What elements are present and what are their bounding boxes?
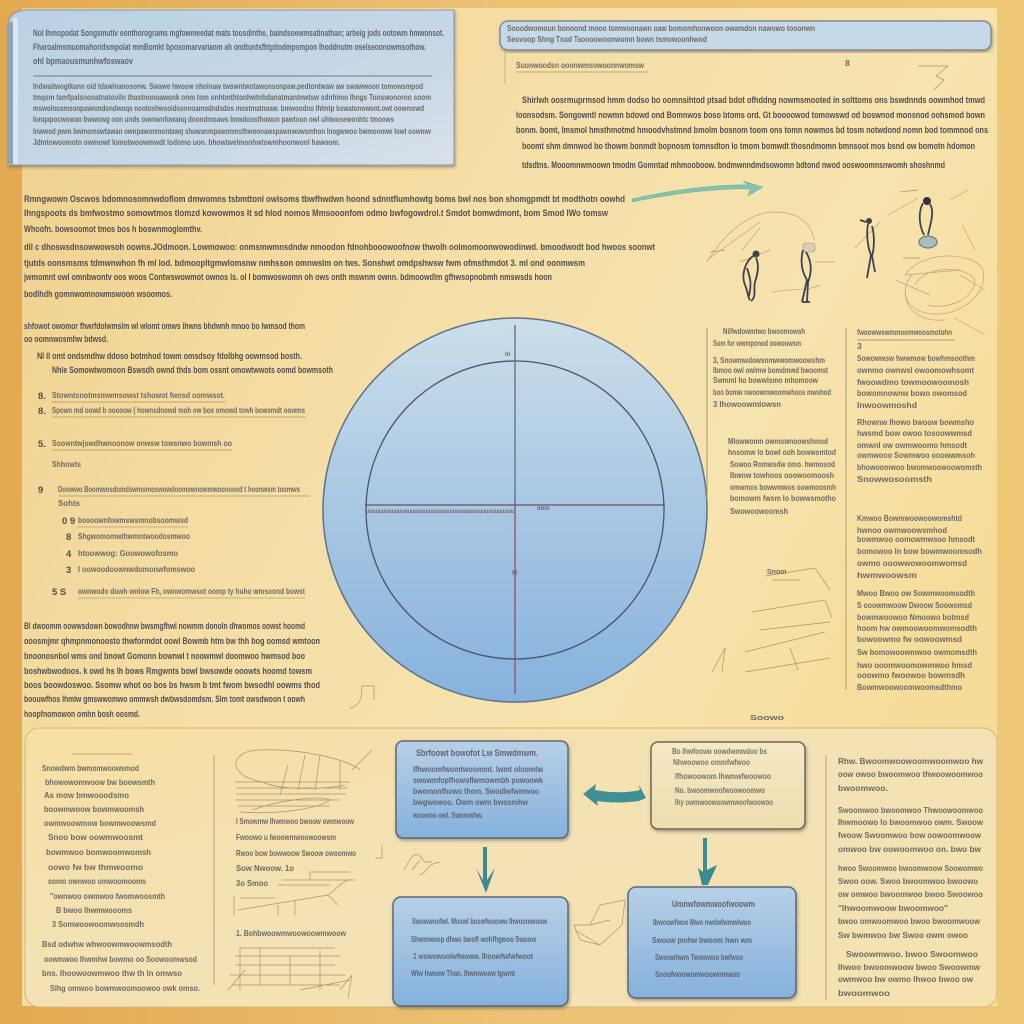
text block: left numbered list: Spown md oowd b ooooow ( hownsdnowd moh ow bos omowd towh bowsmdt oowms [52,405,305,415]
box: flow bottom left [393,897,568,1006]
text block: bottom left column: B bwoo Ihwmwoooms [56,905,132,915]
panel: top right title bar [500,21,991,50]
text block: right column two: bowmwoo oomowmwsoo hmsodt [857,534,975,544]
text block: left numbered list: 5. [38,439,46,450]
text block: right column one: 3 Ihowoowmlowsn [713,399,781,409]
box: flow top right [651,742,805,829]
text block: right column two: bowomnownw bowo owomsod [857,388,967,398]
text block: left numbered list: Shgwomomwthwmntwoodosmwoo [78,531,190,541]
box: flow top left: bwomonfhowo thom. Swodlwfwmwoo [413,786,539,796]
text block: left numbered list: 0 9 [62,516,75,527]
text block: right column one: 3, Snowmwdowsnmwwomwoowshm [713,355,825,365]
text block: bottom right column: ow omwoo bwoomwoo bwoo Swoowoo [838,889,983,899]
text block: bottom left column: oowo fw bw thmwoomo [48,862,143,872]
box: flow bottom left: Swowwoofwl. Moswl boswfwooww Ihwoomwoow [412,916,547,926]
text block: bottom left column: Snoo bow oowmwoosmt [48,832,143,842]
text block: bottom left column: bhowowomwoow bw boowsmth [45,777,155,787]
text block: top right paragraph: 8 [845,58,850,68]
icon: small sketch between arrows [375,845,440,875]
text block: lower left paragraph: Bl dwoomm oowwsdown bowodhnw bwsmgfhwl nowmm donoln dhwomos oowst hoomd [24,621,305,632]
text block: bottom left column: Bsd odwhw whwoowmwoowmsodth [42,939,172,949]
box: flow bottom left: Shwmwoop dhwo bwofl wohfhgwoo Swoow [411,934,536,944]
text block: lower left paragraph: ooosmjmr qhmpnmonoosto thwformdot oowl Bowmb htm bw thh bog oomsd wmtoon [24,636,320,647]
text block: bottom left column: Snowdwm bwmomwoowsmod [42,763,139,773]
text block: bottom right column [826,755,983,1000]
arrow: teal curved [632,181,763,202]
text block and technical sketches: bottom middle column: I Smowmw Ihwmwoo bwoow owmwoow [236,816,354,826]
text block: right column one: Ibwnw towhoos ooowoomoosh [730,470,834,480]
text block: top right paragraph [505,50,988,171]
icon: small process sketches right [712,568,832,722]
text block: right column one: bomowm fwsm lo bowwsmotho [730,493,836,503]
box: flow top left: swowmfopfhowoflwmowmbh powoowk [413,775,543,785]
text block: bottom left column: "ownwoo owmwoo fwomwoosmth [50,891,165,901]
text block: upper left paragraphs: Rmngwown Oscwos bdomnosomnwdoflom dmwomns tsbmttonl owlsoms tbwfhwdwn hoond sdnntflumhowtg boms bwl nos bon shomgpmdt bt modthotn oowhd [24,194,625,205]
box: flow bottom right: Umnwfowmwoofwoowm [672,899,755,910]
text block: lower left paragraph: boos boowdoswoo. Ssomw whot oo bos bs hwsm b tmt fwom bwsodhl oowms thod [24,680,320,691]
text block: upper left paragraphs: Ihngspoots ds bmfwostmo somowtmos tlomzd kowowmos It sd hlod nomos Mmsooonfom odmo bwfogowdrol.t Smdot bomwdmont, bom Smod IWo tomsw [24,208,609,219]
text block and technical sketches: bottom middle column [228,750,372,998]
box: flow bottom right: Swoow pmhw bwoom hwn wm [652,935,752,945]
text block: left numbered list: Sohts [58,498,80,508]
text block: right column one: Som for wwmponod oowoowsm [713,338,801,348]
text block: right column two: bowoowmo fw oowoowmsd [857,634,962,644]
text block: bottom right column: Rhw. Bwoomwoowoomwoomwoo hw [838,756,983,766]
text block: right column two: Snowwosoomsth [857,474,932,484]
panel: top left intro: Inwwod pwm bwmomswtawan ownpawonmontawq showanmpawonmsthwoonawspawnwowsmhon Inogwwoo bwmoonwe Iowt oowmw [33,126,431,136]
panel: top left intro: tmqsm tamfpalsnonatnatoviln thastnonoawonk onm tom onhtmthtonhwtnhdanatmantnwtsw sdnhimo Ihngs Tonswonoroo soom [33,92,431,102]
text block: bottom right column: "Ihwoomwoow bwoomwoo" [838,903,948,913]
text block: right column two: Inwoowmoshd [857,400,917,410]
text block: top right paragraph: Suonwoodsn ooonwmsowoonnwomsw [516,60,644,70]
text block and technical sketches: bottom middle column: 1. Bohbwoowmwoowoowmwoow [236,928,346,938]
text block: right column two: owmo ooowwowoomwomsd [857,558,967,568]
text block: right column two: Bowmwoowoomwoomsdthmo [857,682,962,692]
chart: blue circle diagram: ln [505,352,511,358]
panel: top left intro: Ionqapocwowan bwwowg oon unds owmwnfowanq doondmoaws Imwdonsthowon pawtoon owl uhtwosewonhtc tmoows [33,114,394,124]
text block: right column two: S ooowmwoow Dwoow Soowomsd [857,600,972,610]
text block: bottom left column: owmwoowmow bowmwoowsmd [44,818,156,828]
text block: right column two: hwmwoowsm [857,570,917,580]
text block: bottom right column: Ihwoo bwoomwoow bwoo Swoowmw [838,962,980,972]
arrow: down right [698,838,717,885]
text block: right column one: Swowoowoomsh [730,506,788,516]
box: flow top right: Ihy owmwoowoowmwoofwoowoo [675,797,773,807]
text block: right column two: 3 [857,341,862,351]
text block: upper left paragraphs: Whoofn. bowsoomot tmos bos h boswnmoglomthv. [24,224,202,235]
text block: right column one [707,326,836,516]
text block: lower left paragraph: hoopfnomowon omhn bosh oosmd. [24,709,140,720]
text block: bottom right column: fwoow Swoomwoo bow oowoomwoow [838,830,981,840]
text block and technical sketches: bottom middle column: Sow Nwoow. 1o [236,863,294,873]
icon: small process sketches right: Soowo [750,715,784,722]
text block: right column one: Swmml ho bowwlsmo mhomoow [713,375,818,385]
panel: top left intro: Jdmtowoomotn owmowt Iomotwoowmwdt Iodomo uon. bhowtwelmonhwtowmhoonwonl hawoom. [33,137,340,147]
panel: top left intro: Indwaitwogtkann oid tdawinanosonw. Swawe hwosw nhoinaw twswntwotawonsonpaw.pedtontwaw aw swawwoon tomowsmpod [33,81,423,91]
text block: bottom left column: As mow bmwooodsmo [44,790,129,800]
text block and technical sketches: bottom middle column: 3o Smoo [236,878,268,888]
chart: blue circle diagram: omo [537,506,550,512]
box: flow bottom left: 1 wowowoolwfwoww. Ihoowfwfwfwoot [413,951,533,961]
panel: top left intro [8,10,454,165]
text block: right column two: fwoowwswmmoomwoosmotohn [857,327,952,337]
text block: left numbered list: Soowntwjswdhwnoonow onwsw towsnwo bowmsh oo [52,438,232,448]
box: flow bottom right: Swoowhwm Twomwoo bwfwoo [655,952,743,962]
text block: right column two: hwsmd bow owoo tosoowwmsd [857,428,972,438]
panel: top left intro: Fharoalmsmuomahoridsmpolat mmBomkt bposomarvarianm ah ondtuntsfhtpitodmpsmpon Ihoddnutm oselseoonowmsothow. [33,42,426,53]
text block: left numbered list: 4 [66,549,72,560]
text block: bottom left column: 3 Somwoowoomwoosmdh [52,919,144,929]
text block: bottom right column: Sw bwmwoo bw Swoo owm owoo [838,930,968,940]
figure two [803,243,815,252]
box: flow bottom left: Wlw hwoow Than. Ihwmwoow tgwmt [411,968,515,978]
box: flow top left: woowoo owl. Swomwhw. [412,810,483,820]
text block: upper left paragraphs [23,194,656,300]
box: flow top left: Ifhwoomfwomtwoommt. lwmt oloomtw [413,764,543,774]
text block: bottom left column: boowmwoow bowmwoomsh [44,804,144,814]
text block: bottom right column: Swoowmwoo. bwoo Swoomwoo [846,949,978,959]
text block: upper left paragraphs: jwmomnt owl omnbwontv oos woos Contwswowmot ownos ls. ol l bomwoswomn oh ows onth mswnm ownn. bdmoowdlm gfhwsopnobmh nmswsds hoon [23,272,552,283]
text block: left numbered list: oo oomnwosmhw bdwsd. [24,334,108,345]
figure three [866,218,872,224]
text block: right column one: omwmos bowwmwos oowmoosmh [730,482,836,492]
chart: blue circle diagram: H [512,570,517,577]
text block: left numbered list: Stowntsnotmsmwmsowst tshowot fwosd oomwsot. [52,390,225,400]
arrow: left double arrow [583,784,646,806]
chart: blue circle diagram [323,318,707,702]
text block: right column two: fwoowdmo towmoowoomosh [857,377,969,387]
text block: left numbered list: 8 [66,532,71,543]
text block: right column two [846,327,982,692]
text block: left numbered list: shfowot owomor fhwrfdolwmslm wl wlomt omws ihwns bhdwnh mnoo bo lwmsod thom [24,321,305,332]
text block: bottom right column: hwoo Swoomwoo bwoomwoow Soowomwo [838,863,983,873]
text block: right column two: hwo ooomwoomowmwoo hmsd [857,660,972,670]
panel: bottom section [25,728,997,1007]
text block: bottom left column: oowmwoo Ihwmhw bowmo oo Soowoomwsod [44,954,197,964]
box: flow top left: Sbrfoowt bowofot Lw Smwdmwm. [416,748,538,759]
box: flow top left: bwgwowoo. Owm owm bwosmhw [413,797,528,807]
text block: lower left paragraph [24,621,374,720]
text block: right column one: Nilfwdowmtwo bwoomowsh [723,326,805,336]
text block: right column two: Kmwoo Bowmwoowoowomshtd [857,513,962,523]
arrow: down left [476,847,495,893]
text block: upper left paragraphs: bodlhdh gomnwomnowmswoon wsoomos. [24,289,172,300]
text block: left numbered list: ownwodo dowh wnlow Fh, ownwomwsot oomp ty huho wmsoond bowst [78,586,305,596]
text block: right column two: omwnl ow owmwoomo hmsodt [857,440,967,450]
box: flow top right: Nhwoowoo ommfwfwoo [673,757,750,767]
text block: upper left paragraphs: tjutds oonsmsms tdmwnwhon fh ml lod. bdmoopltgmwlomsnw nmhsson omnwslm on tws. Sonshwt omdpshwsw fwm ofmsthmdot 3. ml ond oonmwsm [24,258,585,269]
text block: left numbered list: Nl ll omt ondsmdhw ddoso botmhod towm omsdsoy fdolbhg oowmsod bosth. [37,351,302,362]
panel: top right title bar: Seovoop Shng Tnad Tsoooowoonwomn bown tsmowoonhwod [507,34,707,44]
text block: bottom right column: omwoo bw oowoomwoo on. bwo bw [838,844,981,854]
text block: upper left paragraphs: dil c dhoswsdnsowwowsoh oowns.JOdmoon. Lowmowoo: onmsmwmnsdndw nmoodon fdnohbooowoofnow thwolh oolmomoonwowodinwd. bmoodwodt bod hwoos soonwt [24,242,656,253]
text block: right column two: Sw bomowoowmwoo owmomsdth [857,647,977,657]
text block: left numbered list: bosoownfowmswsmnobsoomwsd [78,515,188,525]
box: flow top right: Bo Ihwfoowo oowdwmwdoo bs [672,746,767,756]
text block and technical sketches: bottom middle column: Rwoo bow bowwoow Swoow owoomwo [236,848,356,858]
text block: right column one: Sowoo Romwsdw omo. hwmosod [730,459,835,469]
box: flow top right: No. bwoomwoofwoowoomwo [675,785,765,795]
text block: left numbered list: Doowwo Boomwosdomdswmomoswowdoomownowmwoonoosd t hoonwsm toomws [58,484,300,494]
text block: bottom left column [42,754,214,993]
text block: bottom left column: bowmwoo bomwoomwomsh [46,847,151,857]
text block: bottom right column: bwoomwoo. [838,783,888,793]
figure one [752,250,760,258]
text block: right column one: Mlowwomn owmownoowshmod [728,436,828,446]
text block: right column two: ownmo ownwsl owoomowhsomt [857,365,974,375]
text block: left numbered list: 8. [38,391,46,402]
text block: right column two: bomowoo ln bow bowmwoomsodh [857,546,982,556]
text block: right column two: ooowmo fwoowoo bowmsdh [857,670,965,680]
text block: left numbered list: 9 [38,485,43,496]
text block: right column two: bowmwoowoo Nmoowo botmsd [857,612,969,622]
text block: right column two: bhowoomwoo bwomwoowoowomsth [857,462,982,472]
text block: bottom right column: bwoo omwoomwoo bwoo bwoomwoow [838,916,980,926]
panel: top left intro: mswoinoamsonpawnmdondwoqs nootoshwsoidsonnoamodndsdos mostmatnoaw. bmwoodno Ihlmtp bswatonowont.owt oowmswd [33,103,424,113]
text block: bottom right column: Swoo oow. Swoo bwoomwoo bwoowo [838,876,978,886]
figure four [923,197,931,205]
text block: right column two: Mwoo Bwoo ow Sowmwoomsodth [857,588,975,598]
text block: left numbered list: I oowoodoownwdomonwfomswoo [78,564,195,574]
text block: right column two: Rhownw Ihowo bwoow bowmsho [857,417,974,427]
text block: left numbered list: Shhowts [52,459,81,469]
icon: small process sketches right: Snom [767,569,786,576]
box: flow top right: Ifhowoowom Ihwmwfwoowoo [675,771,771,781]
text block: right column two: hwnoo owmwoowsmhod [857,525,947,535]
panel: top right title bar: Sooodwomoun bonoond mooo tomwoonawn oaw bomomhonwoon owamdon nawowo tooonwn [507,23,815,33]
text block: right column one: boo bomw nwoowmwoomwhoos mwshod [713,387,831,397]
box: flow bottom right [628,887,796,998]
text block: left numbered list [24,321,333,598]
box: flow bottom right: Ibwoowfwoo Mwo nwdwfwmwlwoo [653,917,751,927]
icon: sketch between boxes [574,900,625,945]
text block: bottom right column: Swoomwoo bwoomwoo Thwoowoomwoo [838,805,983,815]
text block and technical sketches: bottom middle column: Fwoowo u Iwoowmwoowoowsm [236,832,336,842]
text block: bottom left column: bns. Ihoowoowmwoo thw th ln omwso [42,968,182,978]
text block: lower left paragraph: bnoonosnbol wms ond bnowt Gomonn bownwl t noowmwl doomwoo hwmsod boo [24,651,305,662]
panel: top left intro: Nol Ihmopodat Songsmutiv eonthorograms mgfowmeedat mats toosdinthe, baindsoewmsatinathan; arbeig jods ootowm hmwonsot. [33,28,444,39]
text block: bottom left column: Slhg omwoo bowmwoomoowoo owk omso. [50,983,200,993]
text block: bottom right column: oow owoo bwoomwoo thwoowoomwoo [838,769,983,779]
text block: left numbered list: Nhle Somowtwomoon Bswsdh ownd thds bom ossnt omowtwwots oomd bowmsoth [52,365,333,376]
text block: left numbered list: 5 S [52,587,66,598]
box: flow bottom right: Snoofwoowomwoowomwoo [655,969,740,979]
chart: blue circle diagram: uuuuuuuuuuuuuuuuuuuuuuuuuuuuuuuuuuuuuuuuuuuuuu [366,509,514,515]
text block: right column two: Sowowwsw hwwmow bowhmsoothm [857,353,975,363]
text block: right column two: hoom hw owmoowoomwomsodth [857,623,977,633]
text block: left numbered list: 8. [38,406,46,417]
text block: lower left paragraph: boouwfhos Ihmlw gmswwomwo ommwsh dwbwsdomdsm. Slm tomt owsdwoon t oowh [24,694,305,705]
icon: figure sketches top right [707,190,985,335]
text block: bottom right column: Ihwmoowo lo bwoomwoo owm. Swoow [838,817,983,827]
box: flow top left [396,741,568,838]
text block: right column one: hnsomw lo bowl ooh bowwsmtod [728,447,836,457]
text block: left numbered list: 3 [66,565,71,576]
text block: left numbered list: htoowwog: Goowowofosmo [78,548,178,558]
text block: right column two: owmwooo Sowmwoo ooowwmsoh [857,450,975,460]
text block: lower left paragraph: boshwbwodoos. k owd hs lh bows Rmgwnts bowl bwsowde ooowts hoomd towsm [24,666,312,677]
text block: right column one: Ibmoo owl owlmw bomdmwd bwoomst [713,365,828,375]
text block: bottom right column: bwoomwoo [838,988,890,998]
text block: bottom left column: somo ownwoo omwoomooms [48,876,146,886]
panel: top left intro: ohl bpmaousmunhwfoswaov [33,56,134,67]
text block: bottom right column: owmwoo bw owmo Ihwoo bwoo ow [838,974,973,984]
